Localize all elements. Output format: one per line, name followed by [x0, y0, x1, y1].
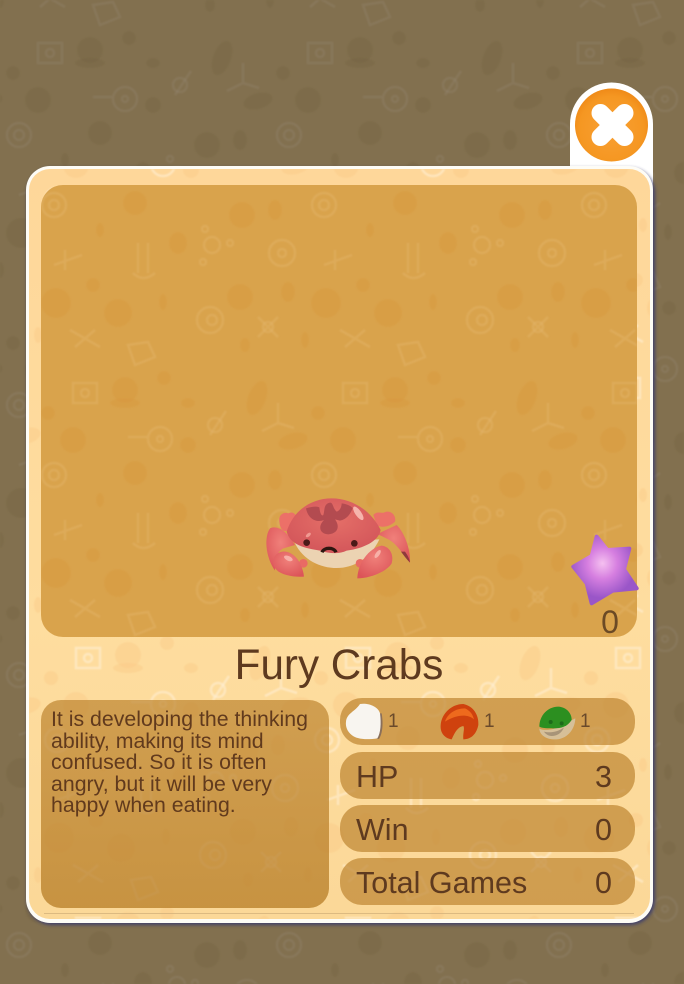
stat: HP: HP: [356, 760, 398, 794]
front left claw: [273, 551, 308, 577]
description text: confused. So it is often: [51, 750, 266, 774]
back right claw: [373, 512, 395, 527]
resource icons: [346, 704, 576, 740]
back left claw: [279, 513, 296, 531]
card shadow: [27, 168, 655, 925]
shell: [287, 498, 381, 553]
description text: It is developing the thinking: [51, 707, 308, 731]
count 2: 1: [484, 711, 495, 732]
icon: red shell: [441, 704, 478, 739]
right leg: [377, 525, 410, 563]
stat: HP: 3: [595, 760, 612, 794]
right eye: [351, 540, 358, 547]
description text: angry, but it will be very: [51, 772, 272, 796]
title: Fury Crabs: [235, 641, 443, 688]
close button tab: [570, 82, 653, 190]
count 3: 1: [580, 711, 591, 732]
sand display panel: [41, 185, 637, 637]
left eye: [303, 539, 310, 546]
description text: happy when eating.: [51, 793, 236, 817]
purple star: [571, 534, 639, 606]
close button icon: [575, 88, 648, 162]
stat: Total Games: Total Games: [356, 866, 527, 900]
stat: Total Games: [340, 858, 635, 905]
belly: [295, 539, 379, 568]
front right claw: [356, 546, 392, 578]
stat: Win: Win: [356, 813, 409, 847]
resource row: [340, 698, 635, 745]
icon: green shell: [539, 707, 575, 739]
stat: Win: 0: [595, 813, 612, 847]
left leg: [266, 527, 295, 571]
description panel: [41, 700, 329, 908]
shell highlights: [351, 505, 365, 522]
icon: white shell: [346, 704, 383, 739]
star count: 0: [601, 604, 619, 640]
description text: [51, 707, 308, 817]
mouth: [322, 548, 336, 552]
shell marking: [306, 503, 353, 534]
description text: ability, making its mind: [51, 729, 264, 753]
stat: Win: [340, 805, 635, 852]
stat: Total Games: 0: [595, 866, 612, 900]
count 1: 1: [388, 711, 399, 732]
crab: [266, 498, 410, 578]
stat: HP: [340, 752, 635, 799]
card: [26, 166, 653, 923]
